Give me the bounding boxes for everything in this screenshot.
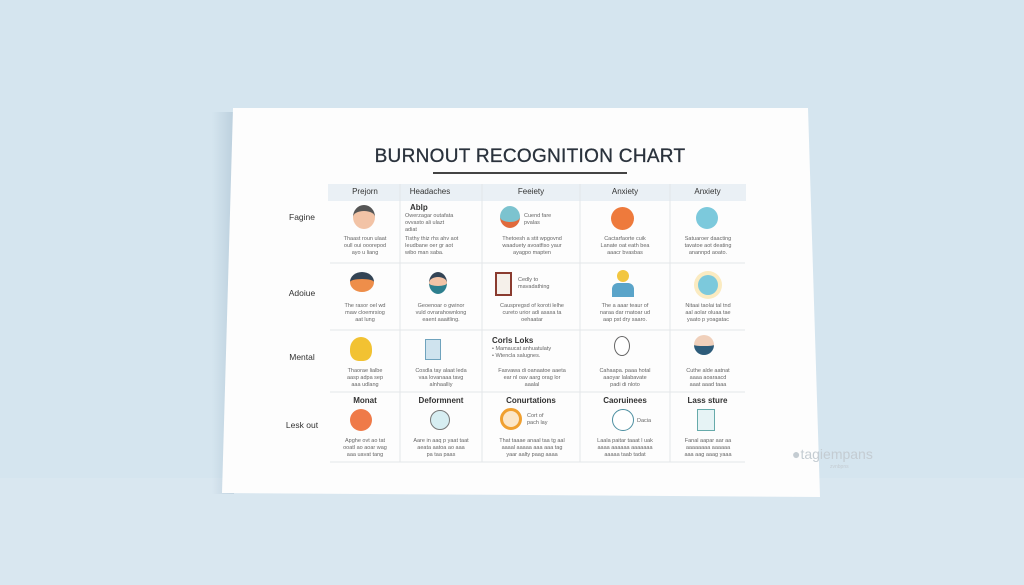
row labels: Fagine (289, 212, 315, 222)
board: Lass sture (687, 396, 728, 405)
board: The rasor oel wd (345, 303, 385, 309)
board: aaa uavat tang (347, 452, 383, 458)
board: ayo u liang (352, 250, 378, 256)
board: Aare in aaq p yaat taat (413, 438, 469, 444)
board: Deformnent (419, 396, 463, 405)
board: oull oui ooorepod (344, 243, 386, 249)
board: Ablp (410, 203, 428, 212)
board: Dacia (637, 418, 651, 424)
row 2 icons (350, 272, 374, 292)
board: Cahaapa. paaa hotal (599, 368, 651, 374)
board: Fasvawa di oanaatoe aaeta (498, 368, 566, 374)
board: Cort of (527, 413, 544, 419)
table (328, 184, 746, 201)
board: aaaal aaaaa aaa aaa tag (502, 445, 562, 451)
board: pa taa paas (427, 452, 455, 458)
row 1 icons (353, 205, 375, 229)
board: Feeiety (518, 187, 544, 196)
board: wibo man saba. (405, 250, 444, 256)
board: alnhaalliy (430, 382, 452, 388)
board: aaalal (525, 382, 539, 388)
board: aaoyar lalabavate (603, 375, 647, 381)
board shadow (212, 112, 234, 494)
header row (328, 184, 746, 201)
board: aeata aatoa ao aaa (417, 445, 465, 451)
board: waaduety avoatfiso yaur (502, 243, 562, 249)
board: Nitaai taolai tal tnd (685, 303, 731, 309)
board: padi di nloto (610, 382, 640, 388)
board: Thetoesh a stit wpgovnd (502, 236, 562, 242)
board: ovvasto ali ulazt (405, 220, 444, 226)
board: Thaast roun ulaat (344, 236, 386, 242)
board: anannpd aoato. (689, 250, 727, 256)
board: pach lay (527, 420, 548, 426)
board: eaent aaaitling. (422, 317, 460, 323)
board: • Wtencla salugnes. (492, 353, 540, 359)
title underline (433, 172, 627, 174)
board: Headaches (410, 187, 450, 196)
board: vuld ovrarahownlong (416, 310, 466, 316)
board: Lanate oat eath bea (601, 243, 649, 249)
board: ayagpo mapten (513, 250, 551, 256)
board: Mental (289, 352, 315, 362)
board: Fanal aapar aar aa (685, 438, 731, 444)
board: Corls Loks (492, 336, 533, 345)
floor (0, 478, 1024, 585)
board: Owerzagar outafata (405, 213, 453, 219)
board: vaa lovanaaa tavg (419, 375, 463, 381)
board: Satuaroer daacting (685, 236, 731, 242)
board: aaaa aaaaaa aaaaaaa (597, 445, 653, 451)
board: cureto urior adi asaxa ta (502, 310, 562, 316)
board: Anxiety (612, 187, 638, 196)
board: mavadathing (518, 284, 550, 290)
watermark: ●tagiempans (792, 446, 873, 462)
text: zvnbpns (830, 464, 849, 470)
board: Cedly to (518, 277, 538, 283)
board: Caoruinees (603, 396, 647, 405)
board: • Mamaucat anhuatulaty (492, 346, 551, 352)
board: The a aaar teaur of (602, 303, 648, 309)
row 4: Monat (353, 396, 377, 405)
board: yaar aalty paag aaaa (506, 452, 558, 458)
board: naraa dar rnatoar ud (600, 310, 650, 316)
board: aasp adpa sep (347, 375, 383, 381)
board: yaato p yoagatac (687, 317, 729, 323)
board: Geoenoar o gwinor (418, 303, 464, 309)
board: Anxiety (694, 187, 721, 196)
board: Apghe ovt ao tat (345, 438, 385, 444)
board: aaaaa taab tadat (604, 452, 646, 458)
board: aaat aaad taaa (690, 382, 726, 388)
board: Tisthy thiz rhs ahv aot (405, 236, 458, 242)
board: aat lung (355, 317, 375, 323)
board: Cactarfaorte cuik (604, 236, 646, 242)
board: aaa aag aaag yaaa (684, 452, 732, 458)
board: aaaaaaaa aaaaaa (686, 445, 730, 451)
board: oehaatar (521, 317, 543, 323)
board: maw cloemrsiog (345, 310, 385, 316)
board: Cuend fare (524, 213, 551, 219)
board: Conurtations (506, 396, 556, 405)
board: aaaa aoaraacd (690, 375, 726, 381)
board: ear nl oav aarg orag lor (504, 375, 560, 381)
board: aaa udlang (351, 382, 379, 388)
board: adiat (405, 227, 417, 233)
board: ooatl ao aoar wag (343, 445, 387, 451)
board: aap pst dry saaro. (603, 317, 647, 323)
board: That taaae anaal taa tg aal (499, 438, 565, 444)
row 3 icons (350, 337, 372, 361)
board: Lesk out (286, 420, 318, 430)
board: Causpregsd of koroti lelhe (500, 303, 564, 309)
board: tavatoe aot deating (685, 243, 731, 249)
board: Laala paitar taaat l uak (597, 438, 653, 444)
board: Ieudbane oer gr aot (405, 243, 453, 249)
board: Adoiue (289, 288, 315, 298)
board: aal aolar oluaa tae (685, 310, 731, 316)
board: Thaorae lialbe (348, 368, 382, 374)
board: Cosdla tay alaat leda (415, 368, 467, 374)
title: BURNOUT RECOGNITION CHART (375, 146, 685, 167)
board: pvalas (524, 220, 540, 226)
board: Cuthe alde aatnat (686, 368, 730, 374)
board: aaacr bvasbas (607, 250, 643, 256)
column headers: Prejorn (352, 187, 378, 196)
